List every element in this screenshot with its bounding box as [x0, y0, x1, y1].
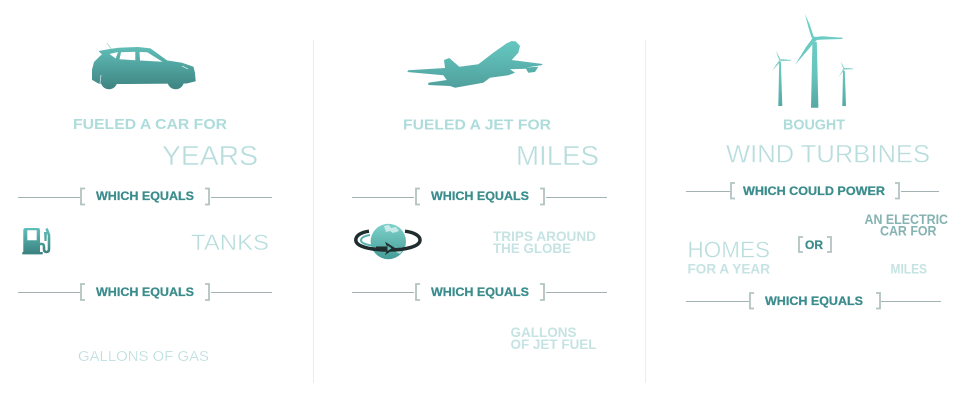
label: wind turbines: WIND TURBINES [726, 141, 930, 169]
label: trips around the globe: THE GLOBE [493, 240, 571, 256]
label: miles: MILES [516, 140, 599, 171]
label: homes for a year: FOR A YEAR [688, 260, 770, 276]
label: an electric car for [864, 211, 948, 239]
divider: which equals [18, 188, 272, 204]
label: gallons of jet fuel: OF JET FUEL [510, 336, 597, 352]
label: gallons of jet fuel [510, 324, 597, 352]
label: an electric car for: CAR FOR [880, 223, 936, 239]
label: years: YEARS [162, 140, 258, 171]
label: or: OR [805, 240, 824, 252]
divider: which equals: WHICH EQUALS [96, 287, 194, 299]
divider: which equals [352, 188, 607, 204]
divider: which equals [352, 284, 607, 300]
icon: car [92, 43, 196, 89]
divider: which equals: WHICH EQUALS [431, 191, 529, 203]
label: homes for a year: HOMES [688, 236, 770, 262]
icon: wind turbines [772, 14, 853, 108]
label: or [799, 237, 831, 252]
divider: which equals: WHICH EQUALS [96, 191, 194, 203]
label: tanks: TANKS [191, 230, 269, 255]
divider: which equals [686, 293, 941, 308]
label: homes for a year [688, 236, 770, 276]
heading: fueled a jet: FUELED A JET FOR [403, 116, 551, 134]
panel: wind turbines [686, 14, 948, 308]
heading: fueled a car: FUELED A CAR FOR [73, 116, 227, 133]
divider: which could power [686, 183, 939, 198]
icon: jet [407, 41, 543, 88]
label: trips around the globe [493, 228, 596, 256]
label: gallons of gas: GALLONS OF GAS [78, 349, 209, 365]
label: an electric car for: AN ELECTRIC [864, 211, 948, 227]
label: trips around the globe: TRIPS AROUND [493, 228, 596, 244]
divider: which equals [18, 284, 272, 300]
label: miles: MILES [890, 260, 927, 276]
icon: globe with ring [356, 224, 420, 259]
divider: which could power: WHICH COULD POWER [743, 186, 886, 198]
panel: car [18, 43, 272, 365]
label: gallons of jet fuel: GALLONS [510, 324, 576, 340]
heading: bought: BOUGHT [783, 116, 845, 134]
panel: jet [352, 41, 607, 352]
icon: fuel pump [22, 228, 49, 254]
divider: which equals: WHICH EQUALS [431, 287, 529, 299]
divider: which equals: WHICH EQUALS [765, 296, 863, 308]
